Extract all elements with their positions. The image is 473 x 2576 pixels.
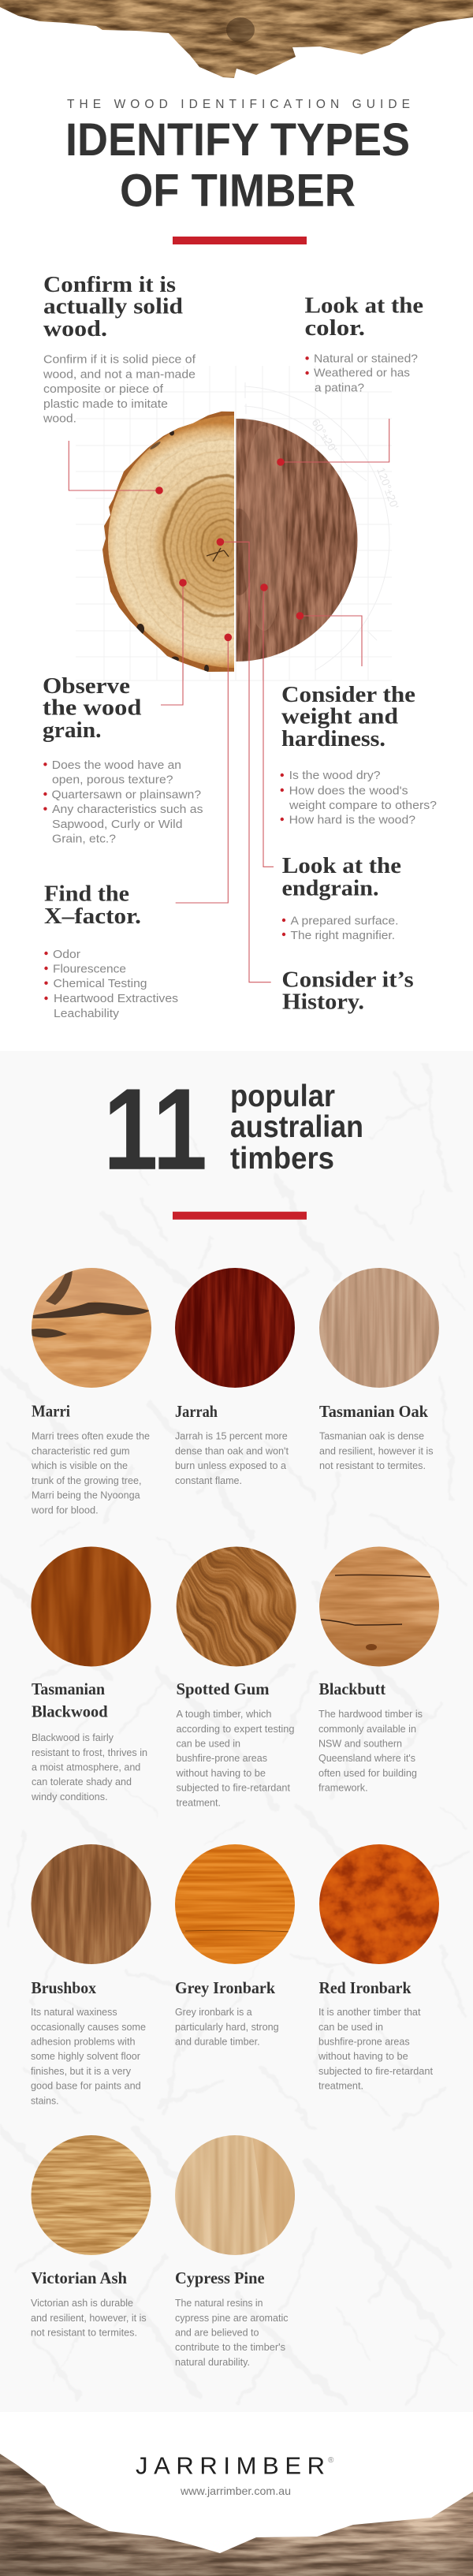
timber card: Jarrah: Jarrah	[175, 1402, 218, 1421]
timber card: Brushbox: Its natural waxiness	[31, 2007, 117, 2018]
text block: look at the endgrain: Look at the	[282, 853, 401, 878]
timber card: Blackbutt: NSW and southern	[318, 1738, 402, 1749]
text block: consider weight and hardiness: How does the wood's	[289, 785, 408, 797]
text block: find the x-factor: Odor	[53, 949, 80, 961]
bark decoration: bottom	[0, 2448, 473, 2576]
swatch: Brushbox	[31, 1844, 151, 1965]
timber card: Tasmanian Blackwood: a moist atmosphere, and	[32, 1761, 140, 1773]
timber card: Tasmanian Oak: and resilient, however it is	[319, 1445, 434, 1456]
timber card: Brushbox: occasionally causes some	[31, 2022, 146, 2033]
timber card: Blackbutt: The hardwood timber is	[318, 1709, 423, 1720]
timber card: Grey Ironbark: Grey ironbark is a	[175, 2007, 252, 2018]
text block: look at the color: Natural or stained?	[314, 352, 418, 365]
text block: look at the endgrain: The right magnifier.	[290, 930, 395, 942]
text block: observe the wood grain: Quartersawn or plainsawn?	[52, 789, 201, 802]
timber card: Grey Ironbark: particularly hard, strong	[175, 2022, 279, 2033]
timber card: Red Ironbark: subjected to fire-retardant	[318, 2066, 434, 2077]
timber card: Marri: Marri trees often exude the	[32, 1431, 150, 1442]
main title: IDENTIFY TYPES	[65, 114, 410, 166]
timber card: Red Ironbark	[318, 1844, 439, 2092]
heading: 11 popular australian timbers: australian	[230, 1110, 363, 1144]
text block: observe the wood grain: grain.	[43, 718, 101, 743]
tolerance labels: 60°±20'	[309, 416, 340, 455]
timber card: Marri: Marri being the Nyoonga	[32, 1490, 140, 1501]
timber card: Tasmanian Blackwood: can tolerate shady and	[32, 1776, 132, 1788]
timber card: Spotted Gum	[177, 1547, 296, 1806]
timber card: Brushbox: some highly solvent floor	[31, 2051, 140, 2062]
timber card: Red Ironbark: treatment.	[318, 2081, 363, 2092]
text block: confirm solid wood: wood.	[43, 316, 107, 341]
timber card: Jarrah: Jarrah is 15 percent more	[175, 1431, 288, 1442]
swatch: Tasmanian Blackwood	[31, 1546, 151, 1667]
text block: confirm solid wood: Confirm if it is solid piece of	[43, 354, 196, 367]
text block: find the x-factor: X–factor.	[44, 904, 141, 929]
text block: consider its history	[281, 967, 414, 1014]
swatch: Tasmanian Oak	[319, 1268, 439, 1388]
timber card: Cypress Pine: Cypress Pine	[175, 2268, 265, 2287]
heading: 11 popular australian timbers: 11	[103, 1065, 207, 1195]
text block: consider weight and hardiness: Is the wood dry?	[289, 770, 381, 782]
heading: 11 popular australian timbers	[103, 1065, 363, 1195]
timber card: Jarrah: burn unless exposed to a	[175, 1460, 286, 1471]
timber card: Spotted Gum: treatment.	[177, 1798, 221, 1809]
timber card: Jarrah: constant flame.	[175, 1475, 242, 1486]
timber card: Brushbox: finishes, but it is a very	[31, 2066, 132, 2077]
text block: confirm solid wood	[43, 272, 196, 426]
footer brand	[136, 2451, 334, 2497]
text block: consider its history: History.	[282, 989, 364, 1014]
timber card: Cypress Pine: natural durability.	[175, 2357, 250, 2368]
timber card: Tasmanian Blackwood: Tasmanian	[32, 1679, 105, 1698]
timber card: Red Ironbark: It is another timber that	[318, 2007, 421, 2018]
timber card: Spotted Gum: can be used in	[177, 1738, 240, 1749]
timber card: Blackbutt: Blackbutt	[318, 1679, 386, 1698]
timber card: Tasmanian Oak: Tasmanian Oak	[319, 1402, 428, 1421]
swatch: Jarrah	[175, 1268, 295, 1388]
timber card: Jarrah	[175, 1268, 295, 1486]
text block: look at the color: Weathered or has	[314, 367, 410, 380]
measuring grid background	[76, 366, 392, 680]
timber card: Jarrah: dense than oak and won't	[175, 1445, 289, 1456]
timber card: Marri: trunk of the growing tree,	[32, 1475, 141, 1486]
leader lines and dots	[69, 419, 389, 982]
header	[65, 98, 410, 244]
timber card: Victorian Ash: Victorian ash is durable	[31, 2298, 133, 2309]
text block: look at the color	[304, 293, 423, 395]
timber card: Victorian Ash: and resilient, however, it is	[31, 2313, 147, 2324]
text block: observe the wood grain: the wood	[43, 695, 142, 721]
tolerance labels	[309, 416, 401, 511]
timber card: Blackbutt: often used for building	[318, 1768, 417, 1779]
text block: find the x-factor: Leachability	[54, 1008, 120, 1020]
timber card: Brushbox: Brushbox	[32, 1978, 96, 1997]
timber card: Red Ironbark: Red Ironbark	[318, 1978, 412, 1997]
text block: consider its history: Consider it’s	[281, 967, 414, 993]
logo: JARRIMBER: JARRIMBER	[136, 2451, 325, 2479]
timber card: Brushbox: adhesion problems with	[31, 2036, 136, 2047]
timber card: Brushbox	[31, 1844, 151, 2107]
timber card: Spotted Gum: A tough timber, which	[177, 1709, 272, 1720]
panel: popular australian timbers	[0, 1051, 473, 2412]
timber card: Tasmanian Oak: Tasmanian oak is dense	[319, 1431, 424, 1442]
text block: consider weight and hardiness: weight and	[281, 704, 398, 729]
timber card: Victorian Ash: not resistant to termites.	[31, 2328, 137, 2339]
timber card: Marri: Marri	[32, 1402, 70, 1421]
text block: observe the wood grain	[43, 673, 203, 846]
timber card: Blackbutt: commonly available in	[318, 1724, 416, 1735]
timber card: Tasmanian Blackwood: resistant to frost, thrives in	[32, 1747, 147, 1758]
swatch: Cypress Pine	[175, 2135, 295, 2256]
text block: confirm solid wood: Confirm it is	[43, 272, 176, 297]
timber card: Grey Ironbark: Grey Ironbark	[175, 1978, 275, 1997]
timber card: Spotted Gum: bushfire-prone areas	[177, 1753, 267, 1764]
text block: look at the color: a patina?	[315, 382, 364, 395]
text block: observe the wood grain: open, porous texture?	[52, 774, 173, 787]
text block: find the x-factor: Flourescence	[53, 964, 126, 976]
timber card: Victorian Ash	[31, 2135, 151, 2339]
text block: observe the wood grain: Grain, etc.?	[52, 833, 116, 846]
main title	[65, 114, 410, 217]
text block: find the x-factor	[44, 881, 178, 1020]
timber card: Brushbox: stains.	[31, 2096, 59, 2107]
swatch: Red Ironbark	[319, 1844, 439, 1965]
timber card: Marri	[31, 1268, 151, 1515]
timber card: Red Ironbark: can be used in	[318, 2022, 383, 2033]
swatch: Marri	[32, 1268, 151, 1388]
text block: consider weight and hardiness	[281, 682, 437, 827]
timber card: Marri: which is visible on the	[31, 1460, 128, 1471]
website url: www.jarrimber.com.au	[180, 2485, 291, 2497]
timber card: Marri: word for blood.	[31, 1504, 99, 1515]
timber card: Tasmanian Blackwood: Blackwood	[32, 1702, 108, 1721]
timber card: Cypress Pine: cypress pine are aromatic	[175, 2313, 289, 2324]
text block: look at the endgrain: A prepared surface.	[290, 915, 399, 927]
timber card: Tasmanian Oak	[319, 1268, 439, 1471]
text block: look at the endgrain: endgrain.	[282, 876, 378, 901]
text block: confirm solid wood: composite or piece of	[43, 383, 164, 396]
red divider	[173, 237, 307, 244]
text block: find the x-factor: Find the	[44, 881, 129, 906]
heading: 11 popular australian timbers: popular	[230, 1079, 335, 1113]
timber card: Grey Ironbark	[175, 1844, 295, 2047]
timber card: Spotted Gum: Spotted Gum	[177, 1679, 270, 1698]
timber card: Cypress Pine	[175, 2135, 295, 2368]
timber card: Cypress Pine: The natural resins in	[175, 2298, 263, 2309]
main title: OF TIMBER	[120, 166, 356, 217]
heading: 11 popular australian timbers: timbers	[230, 1142, 334, 1176]
swatch: Spotted Gum	[177, 1547, 296, 1667]
timber card: Spotted Gum: subjected to fire-retardant	[177, 1783, 291, 1794]
timber card: Red Ironbark: bushfire-prone areas	[318, 2036, 410, 2047]
panel: wood identification diagram	[43, 272, 437, 1020]
timber card: Tasmanian Oak: not resistant to termites.	[319, 1460, 426, 1471]
swatch: Victorian Ash	[31, 2135, 151, 2256]
walnut board: right half	[236, 419, 358, 662]
text block: look at the endgrain	[282, 853, 401, 942]
timber card: Cypress Pine: and are believed to	[175, 2328, 259, 2339]
text block: observe the wood grain: Observe	[43, 673, 130, 699]
text block: find the x-factor: Heartwood Extractives	[54, 993, 178, 1005]
timber card: Spotted Gum: without having to be	[175, 1768, 266, 1779]
log cross-section: left half	[102, 412, 234, 672]
swatch: Grey Ironbark	[175, 1844, 295, 1965]
red divider	[173, 1212, 307, 1220]
text block: confirm solid wood: actually solid	[43, 294, 183, 319]
timber card: Blackbutt	[318, 1546, 439, 1794]
swatch: Blackbutt	[319, 1546, 439, 1667]
timber card: Brushbox: good base for paints and	[31, 2081, 141, 2092]
timber card: Tasmanian Blackwood: windy conditions.	[31, 1791, 108, 1802]
text block: confirm solid wood: plastic made to imitate	[43, 398, 168, 411]
timber card: Blackbutt: Queensland where it's	[318, 1753, 415, 1764]
text block: confirm solid wood: wood, and not a man-made	[43, 368, 196, 381]
timber card: Marri: characteristic red gum	[32, 1445, 130, 1456]
guide subtitle: THE WOOD IDENTIFICATION GUIDE	[67, 98, 410, 111]
timber card: Spotted Gum: according to expert testing	[177, 1724, 295, 1735]
registered mark: ®	[328, 2456, 334, 2465]
text block: observe the wood grain: Sapwood, Curly or Wild	[52, 818, 183, 831]
timber card: Victorian Ash: Victorian Ash	[32, 2268, 127, 2287]
text block: look at the color: color.	[304, 315, 365, 341]
bark decoration: top	[0, 0, 473, 79]
text block: confirm solid wood: wood.	[43, 413, 76, 426]
text block: consider weight and hardiness: hardiness.	[281, 726, 385, 751]
timber card: Blackbutt: framework.	[318, 1783, 368, 1794]
timber card: Cypress Pine: contribute to the timber's	[175, 2342, 285, 2353]
text block: consider weight and hardiness: Consider the	[281, 682, 415, 707]
text block: observe the wood grain: Does the wood have an	[52, 759, 181, 772]
timber card: Tasmanian Blackwood: Blackwood is fairly	[32, 1732, 114, 1743]
tolerance labels: 120°±20'	[374, 466, 401, 511]
timber card: Tasmanian Blackwood	[31, 1546, 151, 1802]
text block: observe the wood grain: Any characteristics such as	[52, 803, 203, 816]
text block: look at the color: Look at the	[304, 293, 423, 319]
text block: consider weight and hardiness: How hard is the wood?	[289, 815, 415, 827]
text block: consider weight and hardiness: weight compare to others?	[289, 800, 437, 812]
timber card: Grey Ironbark: and durable timber.	[175, 2036, 260, 2047]
timber card: Red Ironbark: without having to be	[318, 2051, 408, 2062]
text block: find the x-factor: Chemical Testing	[54, 978, 147, 990]
